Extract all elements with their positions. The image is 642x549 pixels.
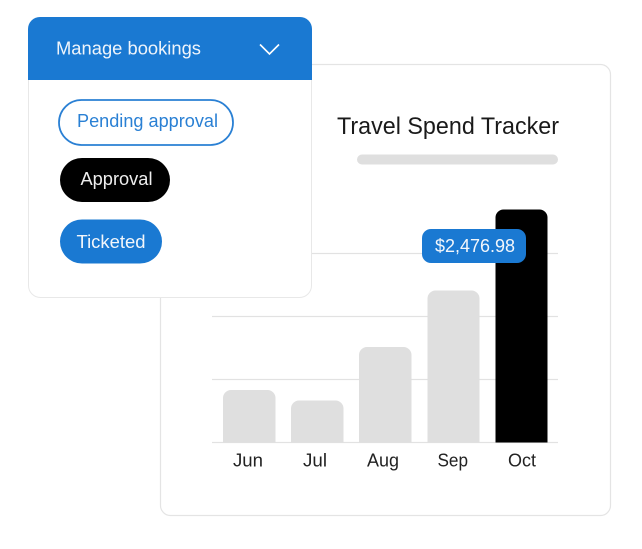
panel: manage bookings dropdown <box>28 17 312 298</box>
bar: Sep <box>428 290 480 442</box>
heading: travel spend tracker: Travel Spend Tracker <box>337 113 559 140</box>
pill: ticketed: Ticketed <box>76 232 146 252</box>
callout: value tooltip: $2,476.98 <box>435 236 515 256</box>
pill: approval <box>60 158 170 202</box>
subtitle placeholder bar <box>357 154 558 164</box>
pill: pending approval: Pending approval <box>77 111 218 131</box>
callout: value tooltip <box>422 229 526 263</box>
pill: approval: Approval <box>80 169 152 189</box>
pill: pending approval <box>59 100 233 145</box>
icon: chevron down <box>260 44 279 54</box>
label: Aug: Aug <box>367 450 399 470</box>
label: Sep: Sep <box>438 450 468 470</box>
label: Jul: Jul <box>303 450 327 470</box>
panel: travel spend tracker card <box>160 64 610 516</box>
bar chart <box>212 210 558 470</box>
dropdown header <box>28 17 312 80</box>
bar: Oct <box>496 210 548 442</box>
label: Jun: Jun <box>233 450 263 470</box>
pill: ticketed <box>60 220 162 264</box>
bar: Jun <box>223 390 276 442</box>
bar: Aug <box>359 347 412 442</box>
dropdown title: Manage bookings <box>56 38 201 58</box>
label: Oct: Oct <box>508 450 536 470</box>
bar: Jul <box>291 400 344 442</box>
